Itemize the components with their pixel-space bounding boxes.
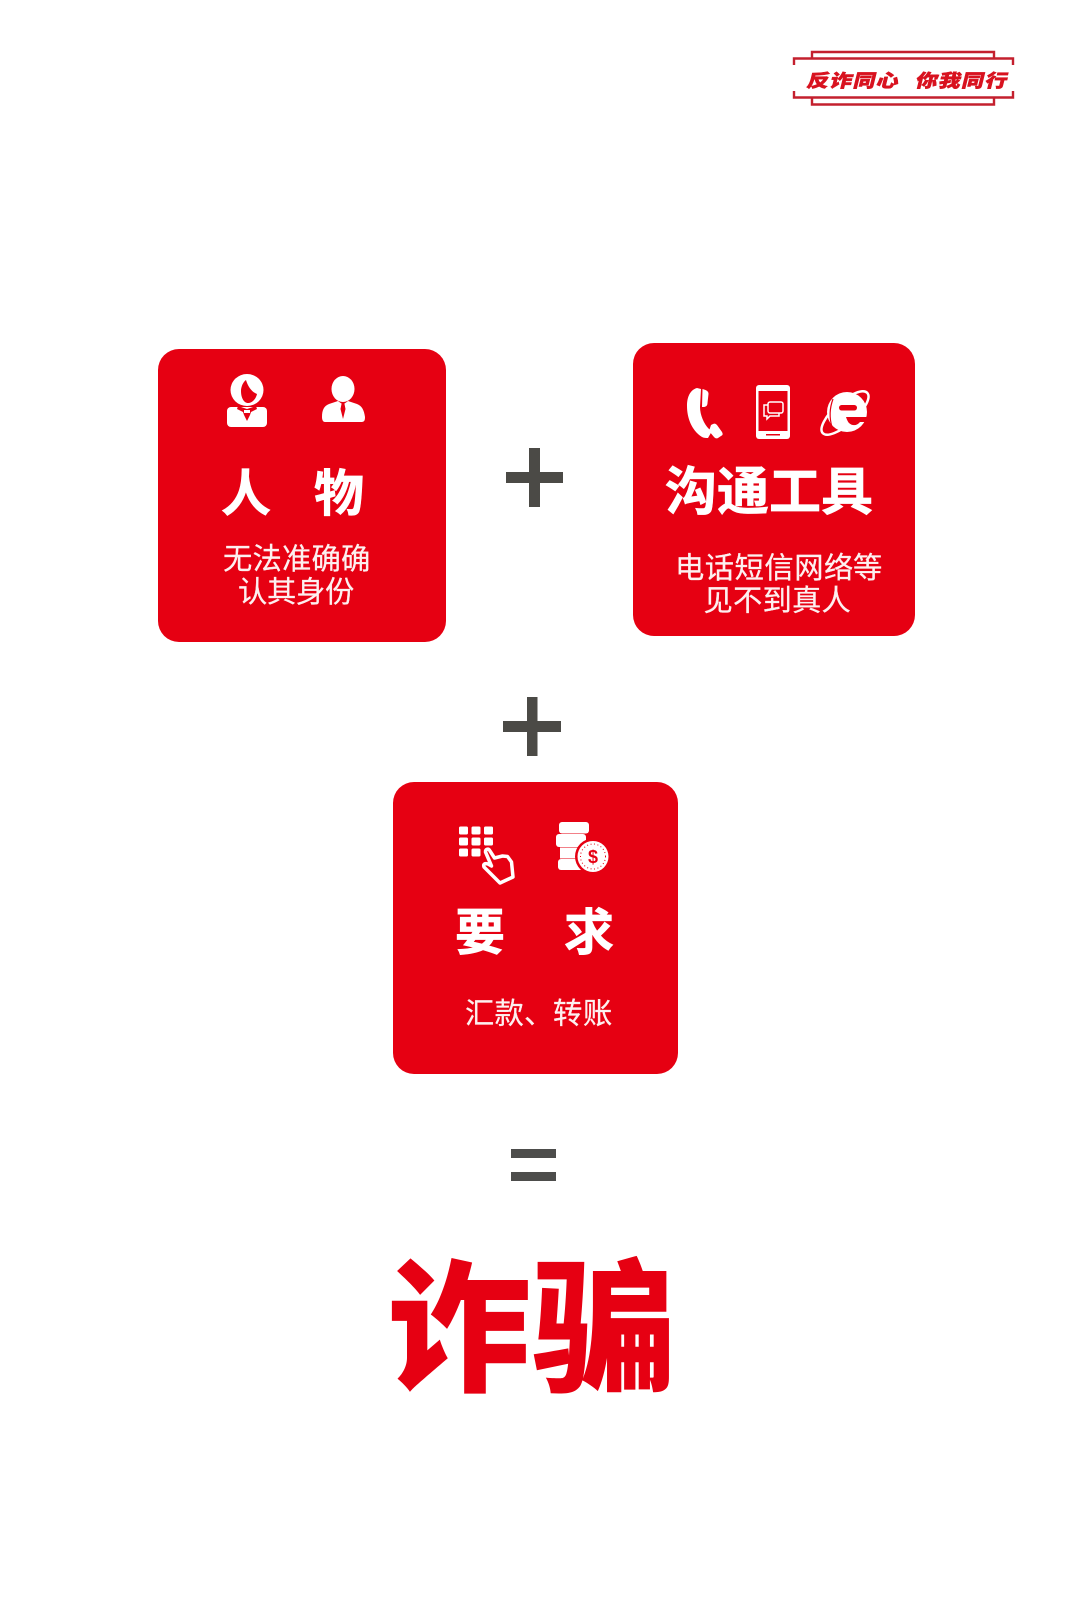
operator: plus 2 [503, 697, 561, 756]
icon: coin stack with dollar coin: $ [588, 847, 598, 867]
logo: anti-fraud slogan badge: 反诈同心你我同行 [805, 71, 1010, 91]
operator: plus 1 [506, 448, 563, 507]
heading: 要求: 要求 [455, 905, 614, 961]
icon: browser logo [815, 385, 875, 441]
heading: 沟通工具: 沟通工具 [665, 464, 873, 522]
heading: 人物: 人物 [221, 466, 364, 522]
icon: telephone [687, 388, 723, 438]
text: phone sms web, unseen person: 电话短信网络等 [675, 552, 882, 585]
text: cannot verify identity [223, 543, 370, 609]
text: cannot verify identity: 认其身份 [238, 576, 354, 609]
text: phone sms web, unseen person: 见不到真人 [704, 584, 851, 618]
icon: woman [227, 374, 267, 427]
result: 诈骗: 诈骗 [387, 1250, 676, 1411]
icon: keypad and pointing hand [459, 826, 513, 883]
icon: man [322, 376, 365, 422]
logo: anti-fraud slogan badge [794, 52, 1013, 104]
panel: people [158, 349, 446, 642]
panel: communication tools [633, 343, 915, 636]
text: remit, transfer: 汇款、转账 [465, 998, 612, 1030]
operator: equals [511, 1149, 556, 1181]
panel: demands [393, 782, 678, 1074]
text: phone sms web, unseen person [675, 552, 882, 618]
text: cannot verify identity: 无法准确确 [223, 543, 370, 576]
icon: smartphone with chat [756, 385, 790, 439]
icon: coin stack with dollar coin [556, 822, 611, 874]
